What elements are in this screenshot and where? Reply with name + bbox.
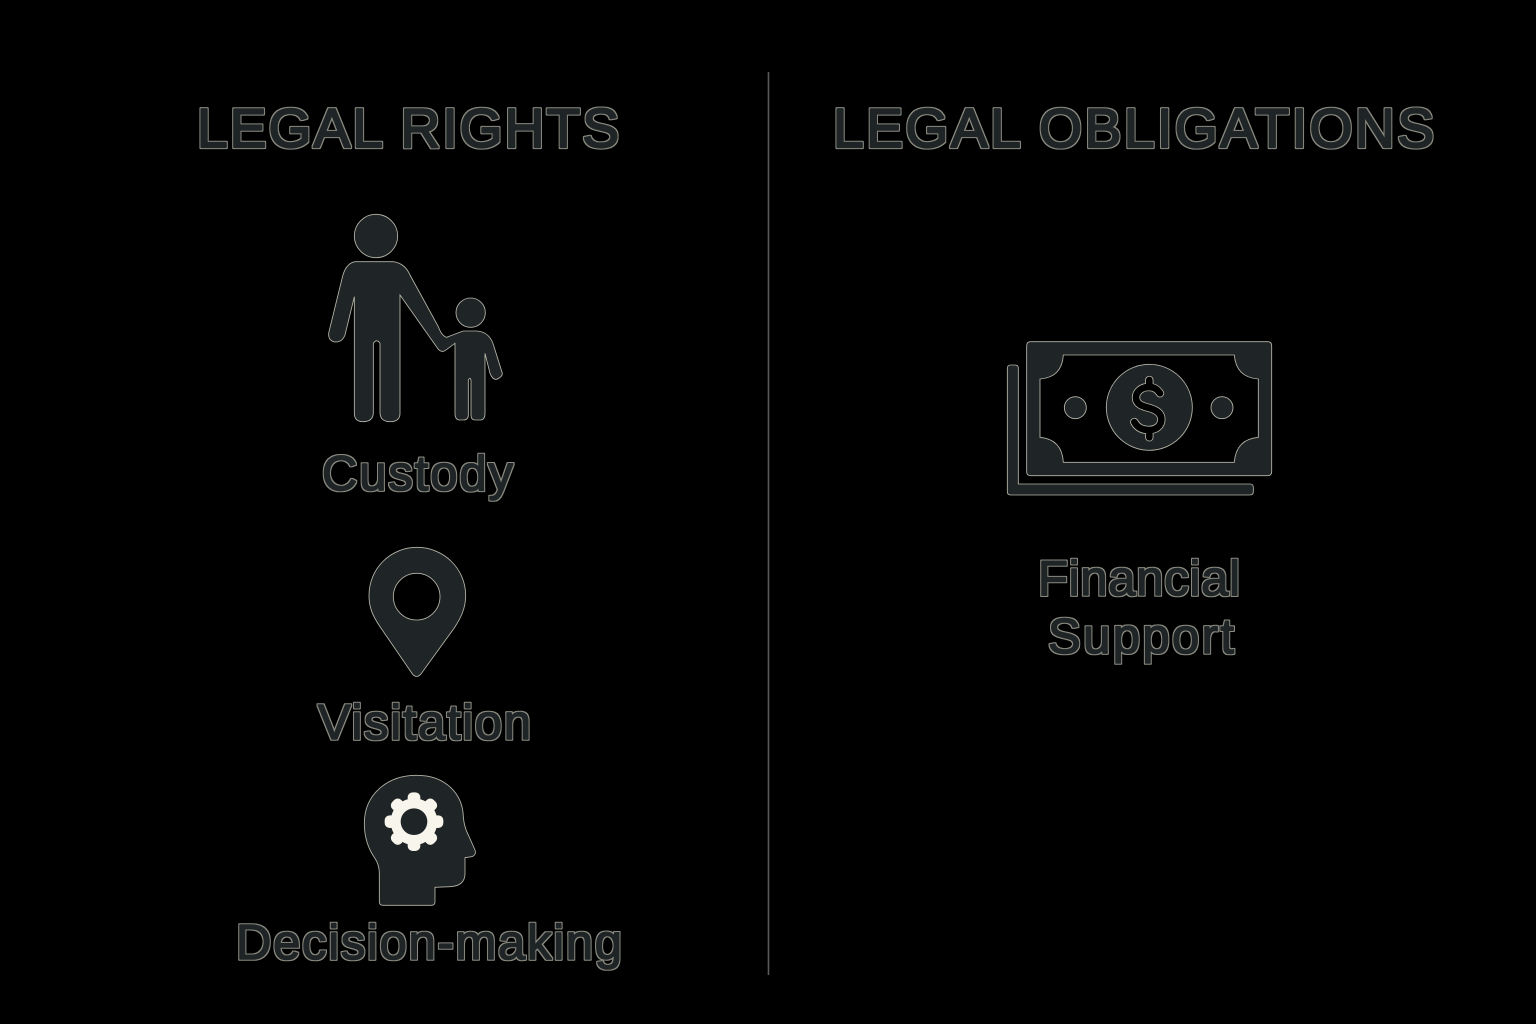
icon: location pin xyxy=(369,547,466,676)
label: financial support: Financial xyxy=(1038,552,1240,606)
panel: legal obligations xyxy=(833,97,1434,664)
icon: head with gear xyxy=(364,775,475,905)
icon: parent holding child's hand xyxy=(329,214,502,422)
label: financial support: Support xyxy=(1048,610,1234,664)
heading: legal obligations: LEGAL OBLIGATIONS xyxy=(833,97,1434,159)
label: custody: Custody xyxy=(322,447,514,501)
panel: legal rights xyxy=(197,97,622,970)
label: financial support xyxy=(1038,552,1240,664)
icon: stack of banknotes xyxy=(1007,342,1272,495)
icon: gear xyxy=(385,792,443,851)
label: visitation: Visitation xyxy=(318,696,531,750)
heading: legal rights: LEGAL RIGHTS xyxy=(197,97,619,159)
label: decision-making: Decision-making xyxy=(236,916,622,970)
icon: dollar sign xyxy=(1134,380,1161,437)
